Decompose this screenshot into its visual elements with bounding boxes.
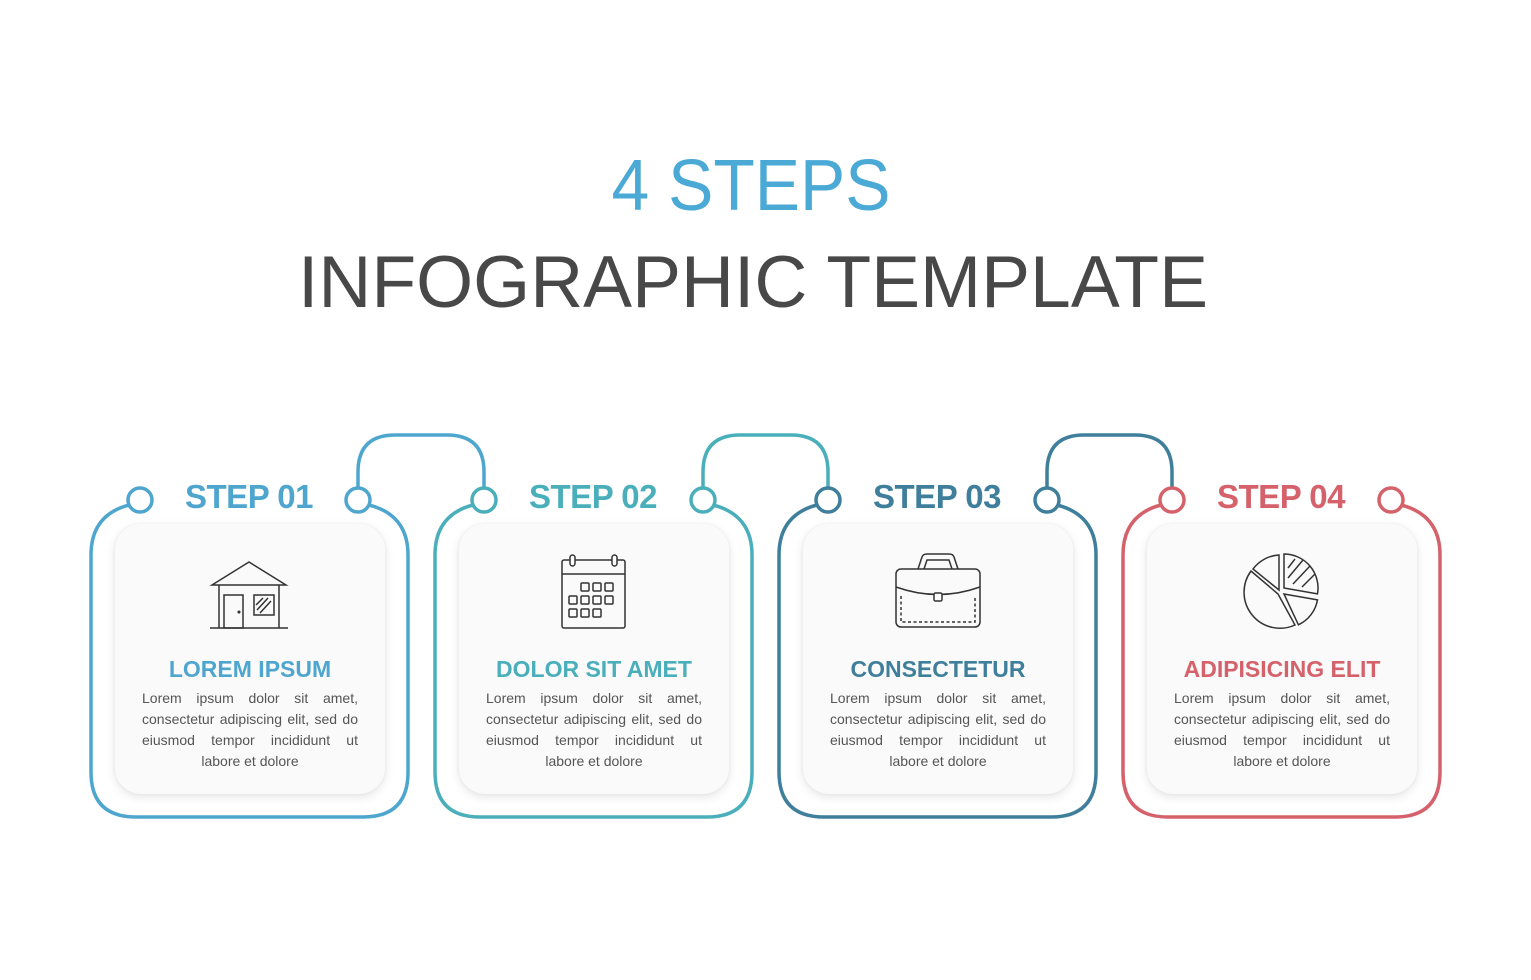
heading 1: LOREM IPSUM	[169, 656, 331, 682]
text: STEP 02	[529, 478, 657, 515]
panel outline 2	[435, 505, 752, 817]
heading 3: CONSECTETUR	[850, 656, 1026, 682]
cards	[115, 524, 385, 794]
panel outline 3	[779, 505, 1096, 817]
connector 2	[703, 435, 828, 488]
title: 4 steps: 4 STEPS	[612, 146, 890, 226]
body text 3: Lorem ipsum dolor sit amet, consectetur adipiscing elit, sed do eiusmod tempor incididunt ut labore et dolore	[830, 690, 1046, 769]
body text 4: Lorem ipsum dolor sit amet, consectetur adipiscing elit, sed do eiusmod tempor incididunt ut labore et dolore	[1174, 690, 1390, 769]
title: 4 steps	[298, 146, 1208, 323]
connector 1	[358, 435, 484, 488]
text: STEP 04	[1217, 478, 1345, 515]
text: STEP 03	[873, 478, 1001, 515]
body text 2: Lorem ipsum dolor sit amet, consectetur adipiscing elit, sed do eiusmod tempor incididunt ut labore et dolore	[486, 690, 702, 769]
icon: calendar	[561, 554, 626, 629]
title: 4 steps: INFOGRAPHIC TEMPLATE	[298, 242, 1208, 323]
panel outline 1	[91, 505, 408, 817]
step labels: STEP 01	[185, 478, 313, 515]
icon: house	[210, 561, 288, 629]
circles	[128, 488, 1403, 512]
icon: briefcase	[895, 553, 981, 628]
panel outline 4	[1123, 505, 1440, 817]
heading 2: DOLOR SIT AMET	[496, 656, 692, 682]
heading 4: ADIPISICING ELIT	[1184, 656, 1380, 682]
body text 1: Lorem ipsum dolor sit amet, consectetur adipiscing elit, sed do eiusmod tempor incididunt ut labore et dolore	[142, 690, 358, 769]
icon: pie chart	[1243, 553, 1319, 629]
connector 3	[1047, 435, 1172, 488]
